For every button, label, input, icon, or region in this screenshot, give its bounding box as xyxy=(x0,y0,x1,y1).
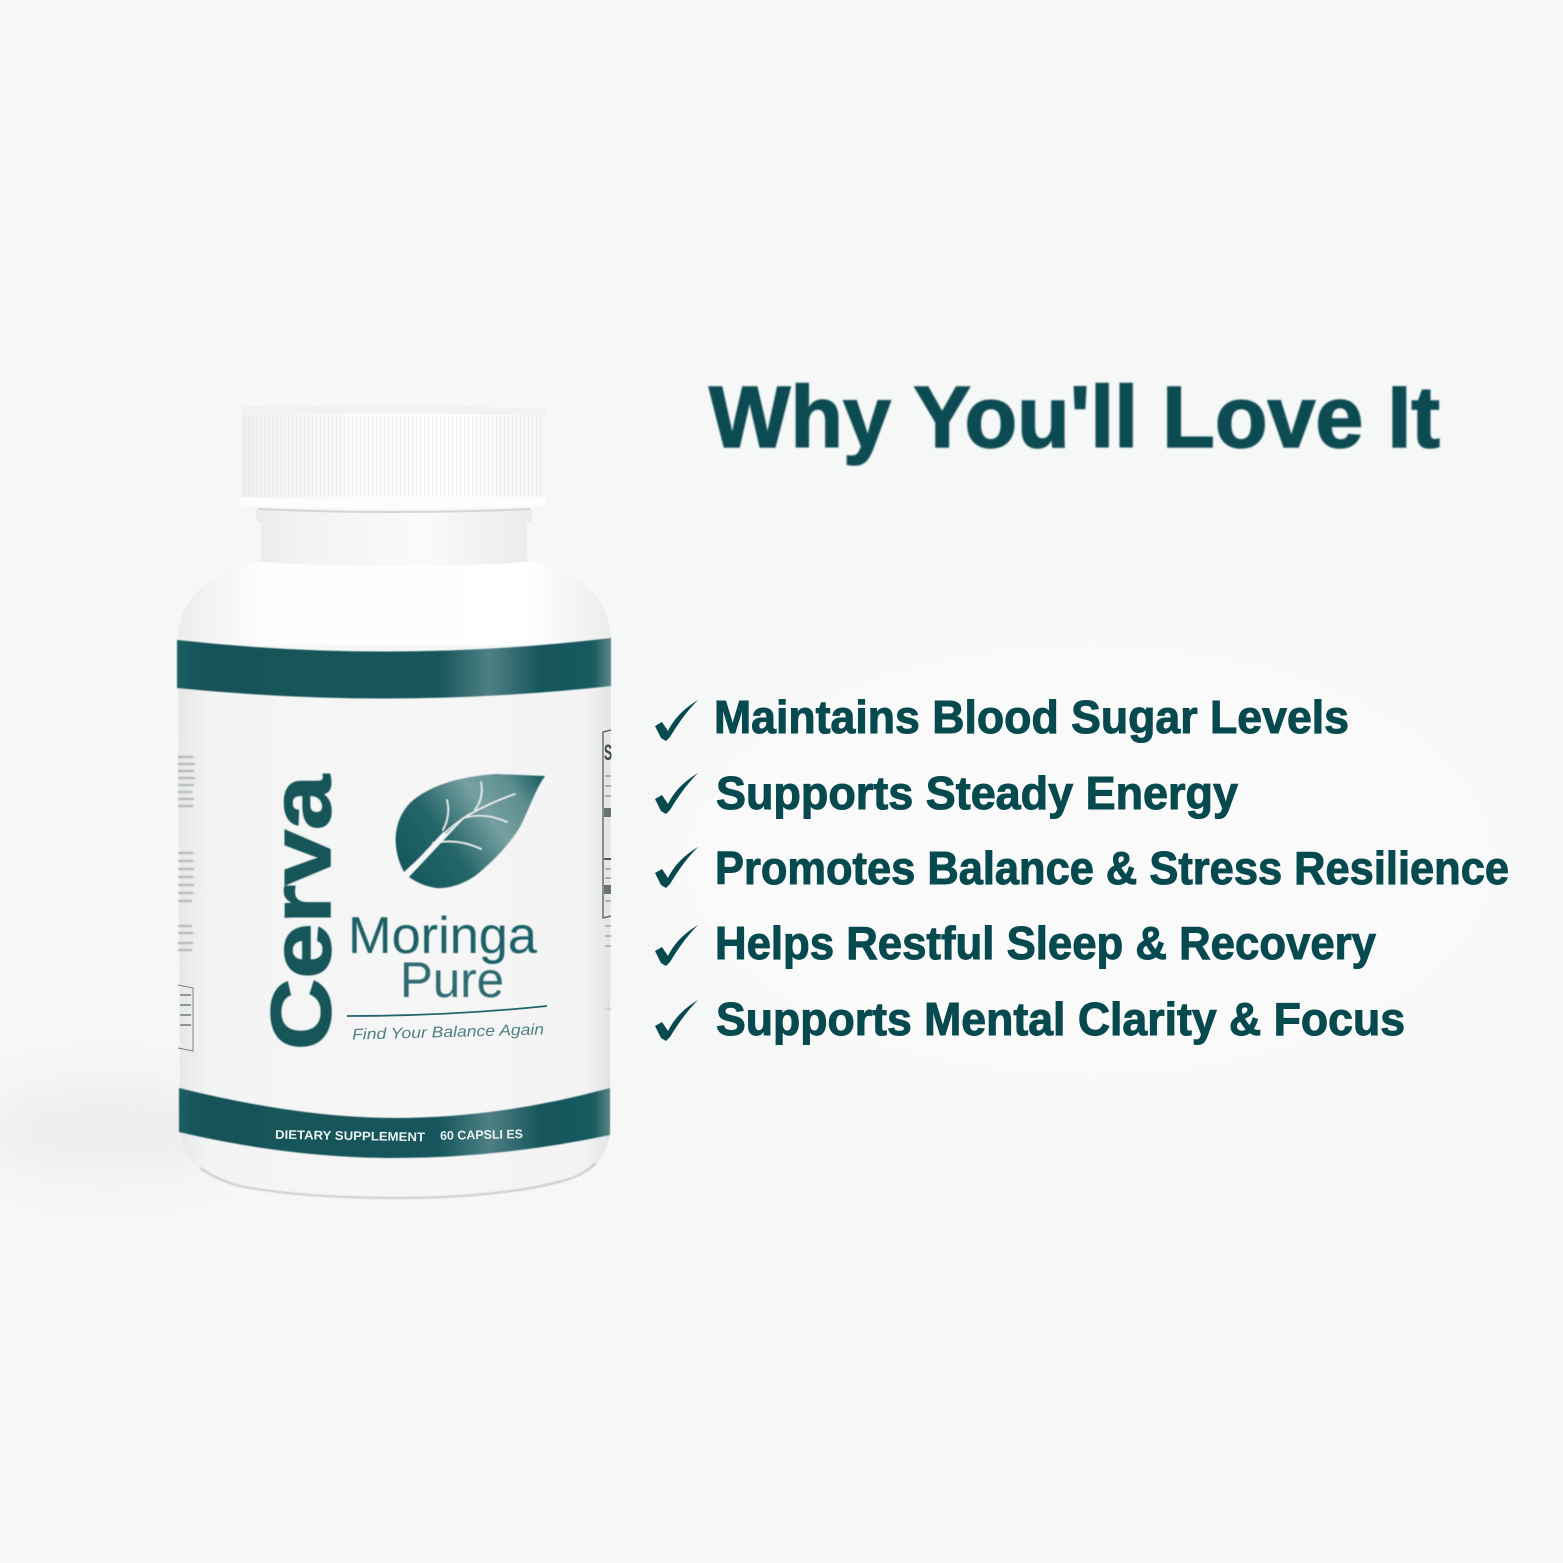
product bottle xyxy=(0,405,612,1198)
benefit 3: Promotes Balance & Stress Resilience xyxy=(715,842,1509,894)
icon: check mark xyxy=(655,847,698,888)
benefit 1: Maintains Blood Sugar Levels xyxy=(714,691,1349,743)
side label: supplement facts box: S xyxy=(604,740,612,765)
side label: left box xyxy=(178,985,193,1051)
icon: check mark xyxy=(655,1000,698,1041)
top label band xyxy=(177,638,611,699)
icon: check mark xyxy=(655,700,698,741)
product name: Pure: Pure xyxy=(400,952,504,1008)
benefit 2: Supports Steady Energy xyxy=(716,767,1238,819)
product name: Moringa: Moringa xyxy=(348,907,537,965)
icon: leaf logo xyxy=(396,774,545,888)
bottle base contour xyxy=(200,1163,596,1198)
side label: left fine print xyxy=(178,756,195,951)
brand name: Cerva xyxy=(254,774,348,1050)
icon: check mark xyxy=(655,925,698,966)
benefit 5: Supports Mental Clarity & Focus xyxy=(716,993,1405,1045)
side label: supplement facts box xyxy=(603,730,612,1010)
bottle neck xyxy=(250,510,538,566)
icon: check mark xyxy=(655,773,698,814)
bottle shadow xyxy=(0,1088,240,1172)
title: Why You'll Love It xyxy=(709,369,1440,466)
label divider xyxy=(347,1006,547,1016)
bottle body xyxy=(178,640,611,1198)
bottom label band xyxy=(179,1088,610,1158)
tagline: Find Your Balance Again xyxy=(352,1021,544,1044)
benefits list xyxy=(655,691,1509,1045)
glow behind benefits list xyxy=(670,630,1510,1090)
bottle shoulder xyxy=(178,561,611,645)
band text: dietary supplement: DIETARY SUPPLEMENT xyxy=(275,1128,425,1144)
band text: capsules: 60 CAPSLI ES xyxy=(440,1127,523,1143)
bottle cap xyxy=(241,405,546,513)
benefit 4: Helps Restful Sleep & Recovery xyxy=(715,917,1376,969)
